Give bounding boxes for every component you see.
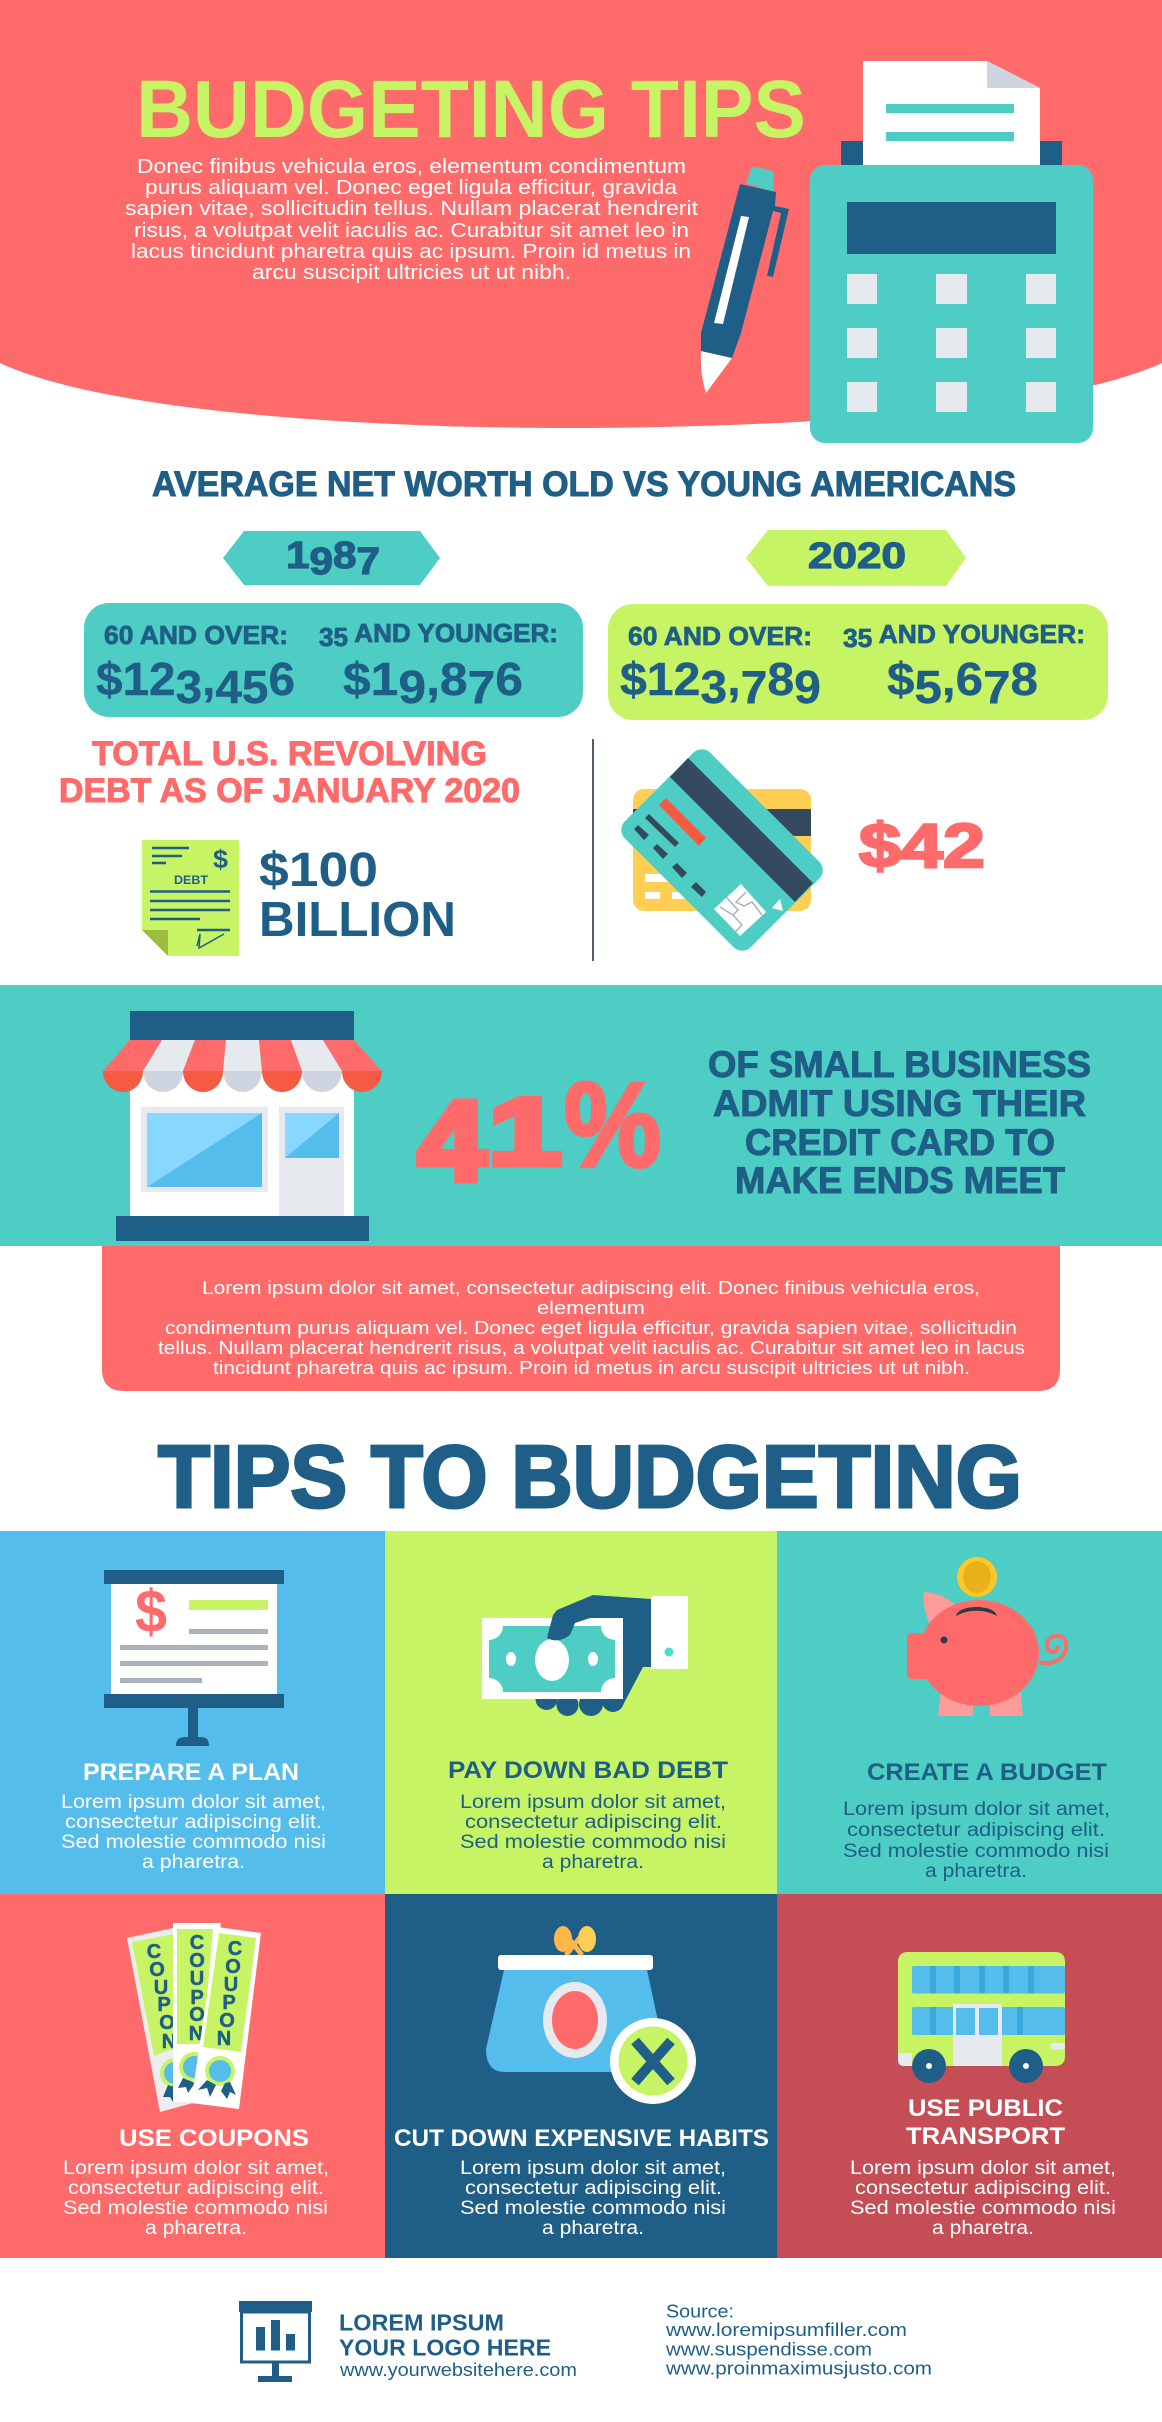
header intro text: risus, a volutpat velit iaculis ac. Curabitur sit amet leo in xyxy=(134,220,689,242)
logo text xyxy=(339,2310,577,2380)
source list: Source: xyxy=(666,2302,734,2322)
stat: 41%: % xyxy=(564,1058,661,1192)
stat: 41% xyxy=(418,1058,661,1204)
tip text: a pharetra. xyxy=(542,1852,644,1873)
icon: hand with banknote xyxy=(482,1595,688,1716)
tip heading: CREATE A BUDGET xyxy=(867,1759,1107,1786)
text: small business statement: ADMIT USING THEIR xyxy=(713,1083,1086,1124)
panel: coral lorem text: tellus. Nullam placerat hendrerit risus, a volutpat velit iaculis ac. Curabitur sit amet leo in lacus xyxy=(158,1338,1025,1358)
tip text: Lorem ipsum dolor sit amet, xyxy=(850,2158,1116,2179)
tip heading: PREPARE A PLAN xyxy=(83,1759,299,1786)
tip text: Sed molestie commodo nisi xyxy=(843,1841,1109,1862)
panel: coral lorem text xyxy=(102,1246,1060,1391)
text: small business statement xyxy=(708,1044,1091,1201)
tip text: Lorem ipsum dolor sit amet, xyxy=(460,1792,726,1813)
header intro text: lacus tincidunt pharetra quis ac ipsum. Proin id metus in xyxy=(131,241,691,263)
panel: use public transport xyxy=(777,1894,1162,2258)
year tag 2020: 2020 xyxy=(808,535,906,576)
panel: 2020 net worth xyxy=(608,530,1108,720)
panel: cut down expensive habits xyxy=(385,1894,777,2258)
tip text: consectetur adipiscing elit. xyxy=(855,2178,1111,2199)
tip text: Lorem ipsum dolor sit amet, xyxy=(460,2158,726,2179)
tip text xyxy=(460,1792,726,1873)
tip heading: USE PUBLIC xyxy=(908,2095,1063,2122)
tip text: Lorem ipsum dolor sit amet, xyxy=(843,1799,1110,1820)
header background curve xyxy=(0,0,1162,428)
stat: $100 billion xyxy=(259,844,456,947)
awning xyxy=(103,1040,382,1092)
stat box 1987: 35 AND YOUNGER: xyxy=(319,618,558,652)
tip heading: PAY DOWN BAD DEBT xyxy=(448,1757,728,1784)
stat box 2020 xyxy=(608,604,1108,720)
tip heading: CUT DOWN EXPENSIVE HABITS xyxy=(394,2125,769,2152)
icon: pen xyxy=(701,167,789,393)
icon: debt document: DEBT xyxy=(174,873,209,887)
icon: presentation board xyxy=(104,1570,284,1746)
stat: 41%: 4 xyxy=(418,1078,486,1204)
tip text: consectetur adipiscing elit. xyxy=(68,2178,324,2199)
header intro text: arcu suscipit ultricies ut ut nibh. xyxy=(252,262,571,284)
panel: create a budget xyxy=(777,1531,1162,1894)
header intro text: purus aliquam vel. Donec eget ligula efficitur, gravida xyxy=(145,177,678,199)
stat box 1987: 60 AND OVER: xyxy=(104,620,288,650)
icon: piggy bank xyxy=(907,1557,1066,1716)
tip text: a pharetra. xyxy=(145,2218,247,2239)
icon: debt document xyxy=(142,840,239,956)
panel: coral lorem text: condimentum purus aliquam vel. Donec eget ligula efficitur, gravida sapien vitae, sollicitudin xyxy=(165,1318,1017,1338)
icon: coupons xyxy=(127,1923,261,2112)
tip text: consectetur adipiscing elit. xyxy=(65,1812,322,1833)
tip text: Sed molestie commodo nisi xyxy=(850,2198,1116,2219)
text: small business statement: CREDIT CARD TO xyxy=(745,1122,1055,1163)
heading: total revolving debt: TOTAL U.S. REVOLVING xyxy=(92,735,487,773)
panel: coral lorem text: Lorem ipsum dolor sit amet, consectetur adipiscing elit. Donec finibus vehicula eros, xyxy=(202,1278,980,1298)
tip text: Sed molestie commodo nisi xyxy=(460,2198,726,2219)
tip text: a pharetra. xyxy=(932,2218,1034,2239)
panel: pay down bad debt xyxy=(385,1531,777,1894)
year tag 2020 xyxy=(746,530,966,586)
icon: coupons: COUPON xyxy=(147,1941,176,2053)
header intro text xyxy=(125,156,699,284)
icon: bus xyxy=(898,1952,1065,2083)
stat: $100 billion: BILLION xyxy=(259,893,456,947)
source list: www.suspendisse.com xyxy=(665,2340,872,2360)
stat box 2020: $5,678 xyxy=(887,653,1038,713)
tip text: Sed molestie commodo nisi xyxy=(61,1832,326,1853)
icon: presentation board: $ xyxy=(135,1578,167,1645)
icon: calculator xyxy=(810,61,1093,443)
stat: 41%: 1 xyxy=(489,1079,561,1184)
panel: small business band xyxy=(0,985,1162,1246)
tip heading: USE COUPONS xyxy=(119,2125,309,2152)
panel: header xyxy=(0,0,1162,443)
stat box 1987: $19,876 xyxy=(343,653,523,713)
tip text xyxy=(61,1792,326,1873)
icon: coupons: COUPON xyxy=(189,1932,205,2045)
logo text: www.yourwebsitehere.com xyxy=(339,2360,577,2380)
tip text: Lorem ipsum dolor sit amet, xyxy=(63,2158,329,2179)
stat: $42: $42 xyxy=(859,812,985,881)
text: small business statement: MAKE ENDS MEET xyxy=(735,1160,1065,1201)
logo text: YOUR LOGO HERE xyxy=(339,2334,551,2360)
tip heading: TRANSPORT xyxy=(906,2123,1065,2150)
heading: average net worth: AVERAGE NET WORTH OLD VS YOUNG AMERICANS xyxy=(152,465,1016,504)
stat box 2020: 35 AND YOUNGER: xyxy=(843,619,1085,653)
stat box 2020: $123,789 xyxy=(620,653,821,713)
stat: $100 billion: $100 xyxy=(259,844,378,897)
tip text: consectetur adipiscing elit. xyxy=(847,1820,1105,1841)
panel: use coupons xyxy=(0,1894,385,2258)
panel: prepare a plan xyxy=(0,1531,385,1894)
panel: 1987 net worth xyxy=(84,531,583,717)
stat box 2020: 60 AND OVER: xyxy=(628,621,812,651)
tip text: consectetur adipiscing elit. xyxy=(465,2178,722,2199)
icon: coupons: COUPON xyxy=(217,1938,242,2050)
year tag 1987 xyxy=(223,531,440,585)
tip text xyxy=(850,2158,1116,2239)
tip text: consectetur adipiscing elit. xyxy=(465,1812,722,1833)
header intro text: sapien vitae, sollicitudin tellus. Nullam placerat hendrerit xyxy=(125,198,699,220)
tip text: a pharetra. xyxy=(542,2218,644,2239)
panel: coral lorem text: tincidunt pharetra quis ac ipsum. Proin id metus in arcu suscipit ultricies ut ut nibh. xyxy=(213,1358,970,1378)
tip text: Sed molestie commodo nisi xyxy=(63,2198,328,2219)
source list: www.proinmaximusjusto.com xyxy=(665,2358,932,2378)
source list xyxy=(665,2302,932,2378)
logo text: LOREM IPSUM xyxy=(339,2310,504,2336)
year tag 1987: 1987 xyxy=(286,535,380,583)
stat box 1987 xyxy=(84,603,583,717)
heading: total revolving debt xyxy=(59,735,520,810)
icon: store xyxy=(103,1011,382,1241)
icon: logo board xyxy=(239,2301,312,2382)
icon: credit cards xyxy=(616,744,828,956)
heading: total revolving debt: DEBT AS OF JANUARY 2020 xyxy=(59,772,520,810)
tip text xyxy=(63,2158,329,2239)
heading: tips to budgeting: TIPS TO BUDGETING xyxy=(158,1427,1022,1526)
tip heading xyxy=(906,2095,1065,2150)
source list: www.loremipsumfiller.com xyxy=(665,2320,907,2340)
tip text: a pharetra. xyxy=(142,1852,245,1873)
stat box 1987: $123,456 xyxy=(96,653,295,713)
icon: purse xyxy=(486,1926,696,2104)
tip text: Sed molestie commodo nisi xyxy=(460,1832,726,1853)
tip text: Lorem ipsum dolor sit amet, xyxy=(61,1792,326,1813)
tip text xyxy=(843,1799,1110,1882)
title: BUDGETING TIPS xyxy=(136,64,806,155)
panel: coral lorem text: elementum xyxy=(537,1298,645,1318)
header intro text: Donec finibus vehicula eros, elementum condimentum xyxy=(137,156,686,178)
footer logo xyxy=(239,2301,577,2382)
icon: debt document: $ xyxy=(213,844,229,874)
tip text: a pharetra. xyxy=(925,1861,1027,1882)
text: small business statement: OF SMALL BUSINESS xyxy=(708,1044,1091,1085)
tip text xyxy=(460,2158,726,2239)
